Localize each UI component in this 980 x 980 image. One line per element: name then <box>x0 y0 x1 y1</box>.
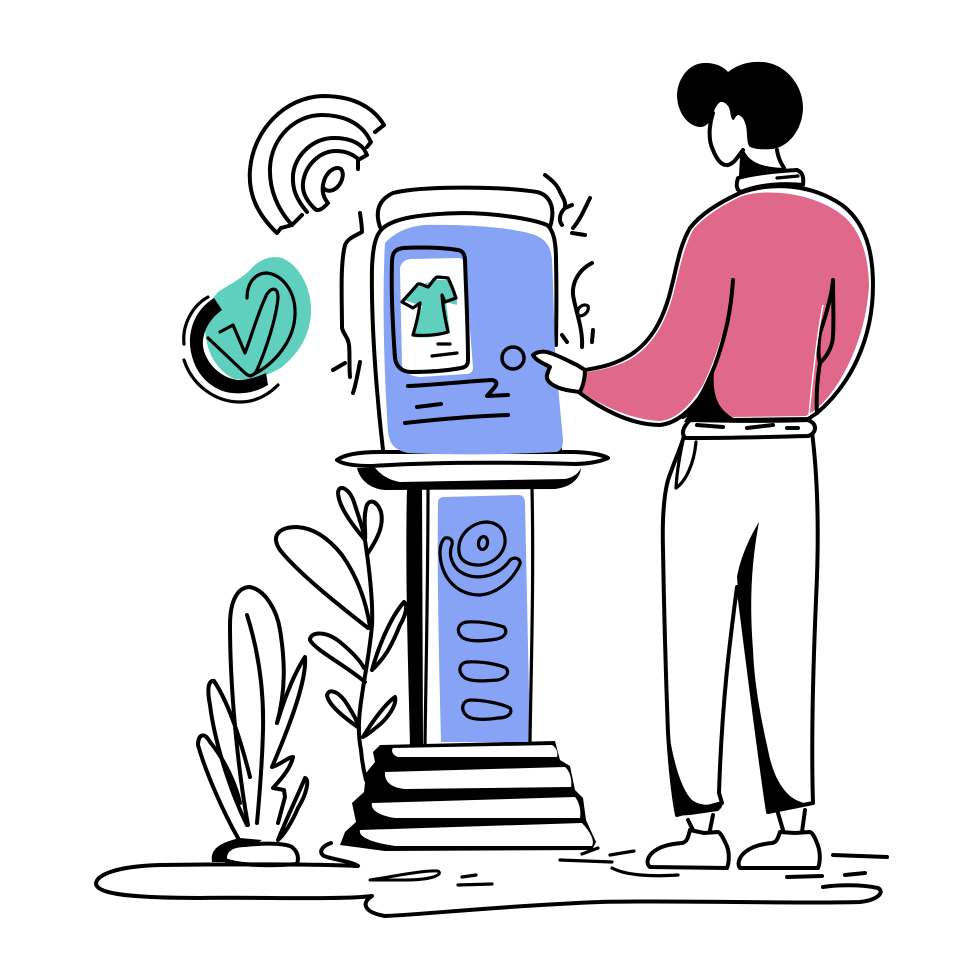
thin outer arcs <box>184 297 208 344</box>
black under-arm wedge <box>684 370 735 422</box>
neck shadow <box>739 150 785 178</box>
teal blob <box>205 257 311 379</box>
sweater fill <box>582 192 869 421</box>
left leg cuff <box>669 733 722 815</box>
hand <box>533 352 585 392</box>
icon: wifi signal <box>250 96 384 233</box>
ground <box>96 843 887 916</box>
kiosk tray <box>337 452 608 490</box>
screen top cap <box>378 188 552 227</box>
hair <box>677 62 803 149</box>
waistband <box>683 420 815 438</box>
sweater outline <box>580 186 873 425</box>
vibration marks <box>333 175 593 393</box>
plant: left bush <box>198 587 307 840</box>
pocket <box>676 440 696 488</box>
icon: target symbol <box>440 522 520 595</box>
screen text lines <box>408 380 508 396</box>
shoes <box>648 830 729 868</box>
collar <box>737 170 803 192</box>
kiosk screen <box>372 188 563 454</box>
check mark <box>247 273 295 376</box>
phone panel <box>392 248 473 377</box>
person <box>533 62 873 868</box>
icon: check badge <box>184 257 311 402</box>
screen body <box>372 213 560 450</box>
blue face <box>384 225 563 454</box>
kiosk column <box>406 488 533 745</box>
icon: shirt <box>402 277 457 338</box>
pants shadow fold <box>737 522 810 811</box>
plant base: rock <box>212 838 298 865</box>
kiosk base steps <box>340 741 596 851</box>
pants <box>663 432 818 815</box>
ankles <box>688 810 805 832</box>
screen button <box>502 347 524 369</box>
black silhouette <box>340 741 596 851</box>
button pills <box>458 622 511 719</box>
face outline <box>710 113 743 165</box>
plant: right branch <box>276 488 406 780</box>
sweater folds <box>683 280 733 417</box>
thick black arc <box>190 298 268 393</box>
